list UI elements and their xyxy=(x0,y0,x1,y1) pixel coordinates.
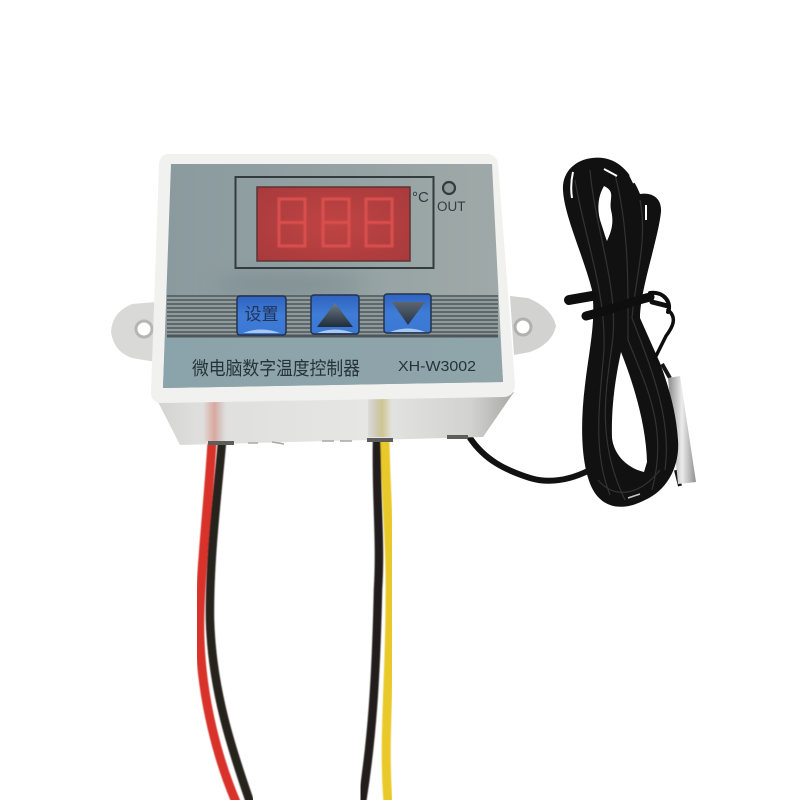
sensor probe xyxy=(662,364,696,486)
button: set: 设置 xyxy=(244,305,278,324)
coil lower opening xyxy=(612,352,647,472)
OUT label: OUT xyxy=(437,199,466,214)
coil upper opening xyxy=(598,186,612,241)
coil strand highlights xyxy=(575,170,666,500)
mounting ear: right xyxy=(510,296,556,355)
lower panel tint xyxy=(163,335,503,388)
OUT indicator lamp xyxy=(443,182,455,194)
red and black power wires xyxy=(200,442,250,800)
product name: 微电脑数字温度控制器 xyxy=(192,358,360,379)
sensor cable from housing to coil xyxy=(470,438,590,481)
housing front frame xyxy=(151,154,515,403)
button: down xyxy=(384,294,431,333)
housing underside xyxy=(153,392,514,445)
cable tie xyxy=(569,293,673,358)
wire exit slots xyxy=(208,435,468,445)
right ear screw hole xyxy=(515,319,531,335)
panel shadow patch above keys xyxy=(215,275,365,295)
button: set xyxy=(237,296,286,335)
left ear screw hole xyxy=(136,321,152,337)
terminal labels xyxy=(248,441,352,444)
wire slot shadows xyxy=(203,398,226,441)
LED display xyxy=(257,187,410,261)
probe cable coil xyxy=(563,158,696,507)
digits 888 xyxy=(279,199,392,246)
button: up xyxy=(311,295,359,334)
model number: XH-W3002 xyxy=(398,358,476,375)
ribbed stripe band xyxy=(167,295,498,337)
front control panel xyxy=(163,164,503,388)
coil silhouette xyxy=(563,158,678,507)
coil white gaps xyxy=(571,169,646,220)
celsius unit: °C xyxy=(412,189,429,206)
mounting ear: left xyxy=(111,302,156,362)
black and yellow relay wires xyxy=(362,442,390,800)
display window frame xyxy=(236,177,434,268)
